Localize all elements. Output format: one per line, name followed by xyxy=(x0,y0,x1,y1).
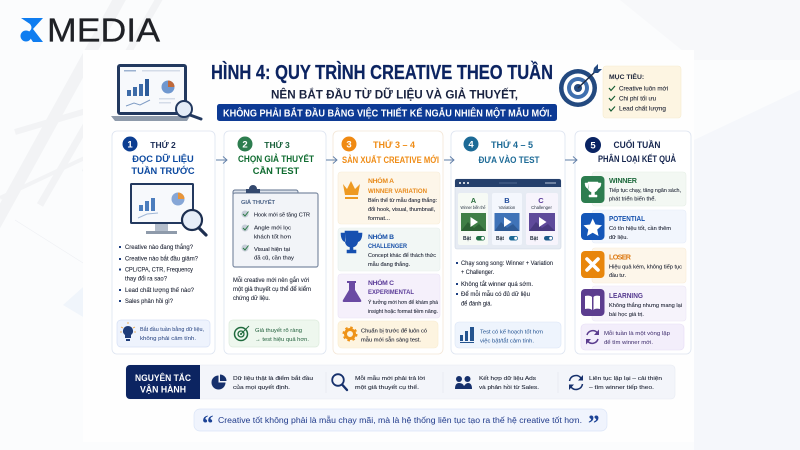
result: learning: LEARNING xyxy=(609,291,643,300)
icon: flask xyxy=(343,281,361,302)
variant B: Bật xyxy=(496,236,504,242)
step 1 heading: ĐỌC DỮ LIỆU xyxy=(132,153,194,164)
result: learning: bài học giá trị. xyxy=(609,312,644,318)
variant B: Variation xyxy=(499,205,516,210)
result: loser xyxy=(581,248,686,283)
variant C: C xyxy=(538,196,544,205)
step 2 heading: CẦN TEST xyxy=(253,166,300,176)
group C: experimental xyxy=(338,274,440,318)
principles heading: NGUYÊN TẮC xyxy=(135,372,192,383)
step 1 heading xyxy=(131,139,195,176)
step 4 heading: THỨ 4 – 5 xyxy=(491,139,533,150)
browser test mockup xyxy=(455,179,561,249)
callout: goals xyxy=(603,66,681,118)
step 4 heading: ĐƯA VÀO TEST xyxy=(478,155,540,165)
icon: monitor with magnifier xyxy=(130,183,206,235)
step 1 question list: thay đổi ra sao? xyxy=(125,274,167,282)
group B text: Concept khác để thách thức xyxy=(368,252,436,259)
principle: ads and sales xyxy=(455,376,539,391)
group C text: insight hoặc format tiềm năng. xyxy=(368,309,438,315)
result: winner: Tiếp tục chạy, tăng ngân sách, xyxy=(609,188,681,194)
quote banner: Creative tốt không phải là mẫu chạy mãi, mà là hệ thống liên tục tạo ra thế hệ creative tốt hơn. xyxy=(218,415,582,425)
clipboard: hypotheses: GIẢ THUYẾT xyxy=(241,199,275,206)
result: loser: đầu tư. xyxy=(609,273,626,279)
step 5 tip: để tìm winner mới. xyxy=(604,339,653,346)
result: learning xyxy=(581,286,686,321)
result: loser: LOSER xyxy=(609,252,632,262)
callout: goals: Chi phí tối ưu xyxy=(619,94,656,102)
step 3 tip xyxy=(338,321,438,348)
icon: target xyxy=(559,64,602,107)
principle: iterate: – tìm winner tiếp theo. xyxy=(589,385,654,391)
clipboard: hypotheses: Angle mới lọc xyxy=(254,226,291,232)
step 4 bullet list: để đánh giá. xyxy=(461,300,492,308)
group C text: NHÓM C xyxy=(368,278,394,287)
clipboard: hypotheses: đã cũ, cần thay xyxy=(254,256,294,262)
step 2 heading: CHỌN GIẢ THUYẾT xyxy=(238,153,314,164)
group A: winner variation xyxy=(338,172,440,224)
step 2 tip: → test hiệu quả hơn. xyxy=(255,337,309,343)
variant C: Challenger xyxy=(531,205,552,210)
panel: step 2 xyxy=(224,131,326,354)
step 3 badge: 3 xyxy=(346,140,352,150)
group A text: format... xyxy=(368,216,390,222)
group C text: EXPERIMENTAL xyxy=(368,289,414,296)
step 2 badge xyxy=(238,136,252,152)
step 1 heading: TUẦN TRƯỚC xyxy=(131,165,195,176)
subtitle highlight pill xyxy=(217,104,557,121)
clipboard: hypotheses xyxy=(233,185,318,267)
panel: step 4 xyxy=(451,131,565,354)
step 5 tip: Mỗi tuần là một vòng lặp xyxy=(604,330,671,337)
group A text xyxy=(368,176,437,222)
principle: hypothesis: một giả thuyết cụ thể. xyxy=(355,384,419,391)
group A text: WINNER VARIATION xyxy=(368,188,427,195)
principle: hypothesis xyxy=(332,374,425,391)
group B text: NHÓM B xyxy=(368,232,394,241)
callout: goals: MỤC TIÊU: xyxy=(609,72,644,81)
clipboard: hypotheses: Hook mới sẽ tăng CTR xyxy=(254,212,310,218)
step 2 tip xyxy=(229,320,319,347)
step 1 heading: THỨ 2 xyxy=(150,139,176,150)
group C text xyxy=(368,278,439,315)
step 4 tip: Test có kế hoạch tốt hơn xyxy=(480,330,543,336)
arrow 1 to 2 xyxy=(216,156,227,164)
principle: hypothesis: Mỗi mẫu mới phải trả lời xyxy=(355,375,425,382)
principle: iterate: Liên tục lặp lại – cải thiện xyxy=(589,376,662,382)
principle: ads and sales: Kết hợp dữ liệu Ads xyxy=(479,376,536,382)
step 1 question list xyxy=(119,242,198,305)
principle: iterate xyxy=(569,375,662,391)
quote banner: ” xyxy=(588,411,600,436)
step 4 bullet list: Để mỗi mẫu có đủ dữ liệu xyxy=(461,289,530,298)
step 5 badge xyxy=(585,137,601,153)
principles heading xyxy=(126,365,200,399)
step 5 heading xyxy=(598,139,677,164)
step 2 paragraph: Mỗi creative mới nên gắn với xyxy=(233,275,309,284)
subtitle: NÊN BẮT ĐẦU TỪ DỮ LIỆU VÀ GIẢ THUYẾT, xyxy=(271,88,518,102)
icon: cross xyxy=(581,251,604,278)
step 2 badge: 2 xyxy=(242,140,248,150)
result: winner xyxy=(581,172,686,206)
group B text xyxy=(368,232,436,268)
arrow 3 to 4 xyxy=(444,156,454,164)
result: learning: Không thắng nhưng mang lại xyxy=(609,302,682,309)
clipboard: hypotheses: khách tốt hơn xyxy=(254,234,291,240)
result: potential: dữ liệu. xyxy=(609,235,628,241)
variant A xyxy=(458,193,488,245)
step 1 tip xyxy=(117,320,210,347)
step 3 heading: SẢN XUẤT CREATIVE MỚI xyxy=(342,154,439,165)
group A text: NHÓM A xyxy=(368,176,394,185)
group A text: Biến thể từ mẫu đang thắng: xyxy=(368,197,437,204)
panel: step 3 xyxy=(333,131,443,354)
variant B: B xyxy=(504,196,510,205)
step 3 heading: THỨ 3 – 4 xyxy=(373,139,415,150)
step 1 question list: Creative nào đang thắng? xyxy=(125,242,193,251)
group A text: đổi hook, visual, thumbnail, xyxy=(368,206,435,213)
icon: open book xyxy=(581,289,604,316)
result: potential xyxy=(581,210,686,243)
group B text: CHALLENGER xyxy=(368,243,407,250)
quote banner xyxy=(194,409,607,436)
step 3 badge xyxy=(342,136,356,152)
group C text: Ý tưởng mới hơn để khám phá xyxy=(368,299,439,306)
panel: step 1 xyxy=(112,131,215,354)
step 1 tip: Bắt đầu tuần bằng dữ liệu, xyxy=(140,326,204,333)
quote banner: “ xyxy=(202,411,214,436)
step 1 badge xyxy=(122,136,138,152)
step 3 tip: mẫu mới sẵn sàng test. xyxy=(361,336,421,344)
title: HÌNH 4: QUY TRÌNH CREATIVE THEO TUẦN xyxy=(211,61,553,84)
step 2 paragraph: chứng dữ liệu. xyxy=(233,295,270,302)
icon: laptop dashboard xyxy=(111,64,201,121)
arrow 4 to 5 xyxy=(565,156,577,164)
result: winner: WINNER xyxy=(609,176,638,185)
step 5 heading: CUỐI TUẦN xyxy=(614,139,660,150)
step 1 badge: 1 xyxy=(127,140,133,150)
result: potential: POTENTIAL xyxy=(609,214,646,223)
group B: challenger xyxy=(338,228,440,271)
step 4 tip: việc bật/tắt cảm tính. xyxy=(480,338,534,344)
step 4 tip xyxy=(455,322,561,348)
variant A: A xyxy=(471,196,477,205)
step 4 bullet list xyxy=(456,260,553,308)
icon: crown xyxy=(343,181,360,199)
variant A: Bật xyxy=(463,236,471,242)
arrow 2 to 3 xyxy=(326,156,337,164)
principle: ads and sales: và phản hồi từ Sales. xyxy=(479,385,539,391)
callout: goals: Lead chất lượng xyxy=(619,104,666,112)
variant C: Bật xyxy=(530,236,538,242)
step 5 badge: 5 xyxy=(590,140,596,152)
step 2 tip: Giả thuyết rõ ràng xyxy=(255,328,302,334)
step 4 badge xyxy=(464,136,478,152)
step 2 heading xyxy=(238,139,314,176)
clipboard: hypotheses: Visual hiện tại xyxy=(254,247,290,253)
step 5 heading: PHÂN LOẠI KẾT QUẢ xyxy=(598,153,677,164)
step 2 paragraph: một giả thuyết cụ thể để kiểm xyxy=(233,284,311,293)
subtitle highlight pill: KHÔNG PHẢI BẮT ĐẦU BẰNG VIỆC THIẾT KẾ NGẪU NHIÊN MỘT MẪU MỚI. xyxy=(223,106,552,120)
variant A: Winner biến thể xyxy=(460,205,486,210)
step 4 bullet list: Chạy song song: Winner + Variation xyxy=(461,260,553,267)
logo: 3MEDIA: MEDIA xyxy=(47,12,160,48)
step 4 bullet list: Không tắt winner quá sớm. xyxy=(461,279,533,288)
step 3 heading xyxy=(342,139,439,165)
result: potential: Có tín hiệu tốt, cần thêm xyxy=(609,226,671,232)
step 1 question list: Sales phản hồi gì? xyxy=(125,296,173,305)
step 5 tip xyxy=(581,324,684,350)
step 2 heading: THỨ 3 xyxy=(264,139,290,150)
group B text: mẫu đang thắng. xyxy=(368,261,410,268)
principle: data: Dữ liệu thật là điểm bắt đầu xyxy=(233,375,313,382)
principle: data: của mọi quyết định. xyxy=(233,384,290,391)
variant B xyxy=(492,193,522,245)
principle: data xyxy=(212,374,313,391)
icon: winner trophy xyxy=(581,176,604,203)
icon: trophy xyxy=(341,231,362,253)
step 4 heading xyxy=(478,139,540,165)
step 2 paragraph xyxy=(233,275,311,302)
callout: goals: Creative luôn mới xyxy=(619,86,668,92)
panel: operating principles xyxy=(126,365,675,399)
step 3 tip: Chuẩn bị trước để luôn có xyxy=(361,328,428,334)
result: loser: Hiệu quả kém, không tiếp tục xyxy=(609,264,682,270)
step 1 question list: CPL/CPA, CTR, Frequency xyxy=(125,266,194,274)
step 4 badge: 4 xyxy=(468,140,474,150)
step 4 bullet list: + Challenger. xyxy=(461,269,494,276)
panel: step 5 xyxy=(575,131,691,354)
principles heading: VẬN HÀNH xyxy=(140,384,186,394)
result: winner: phát triển biến thể. xyxy=(609,196,656,202)
step 1 tip: không phải cảm tính. xyxy=(140,336,196,342)
step 1 question list: Lead chất lượng thế nào? xyxy=(125,285,194,294)
step 1 question list: Creative nào bắt đầu giảm? xyxy=(125,254,198,262)
variant C xyxy=(526,193,558,245)
icon: star xyxy=(581,213,604,240)
